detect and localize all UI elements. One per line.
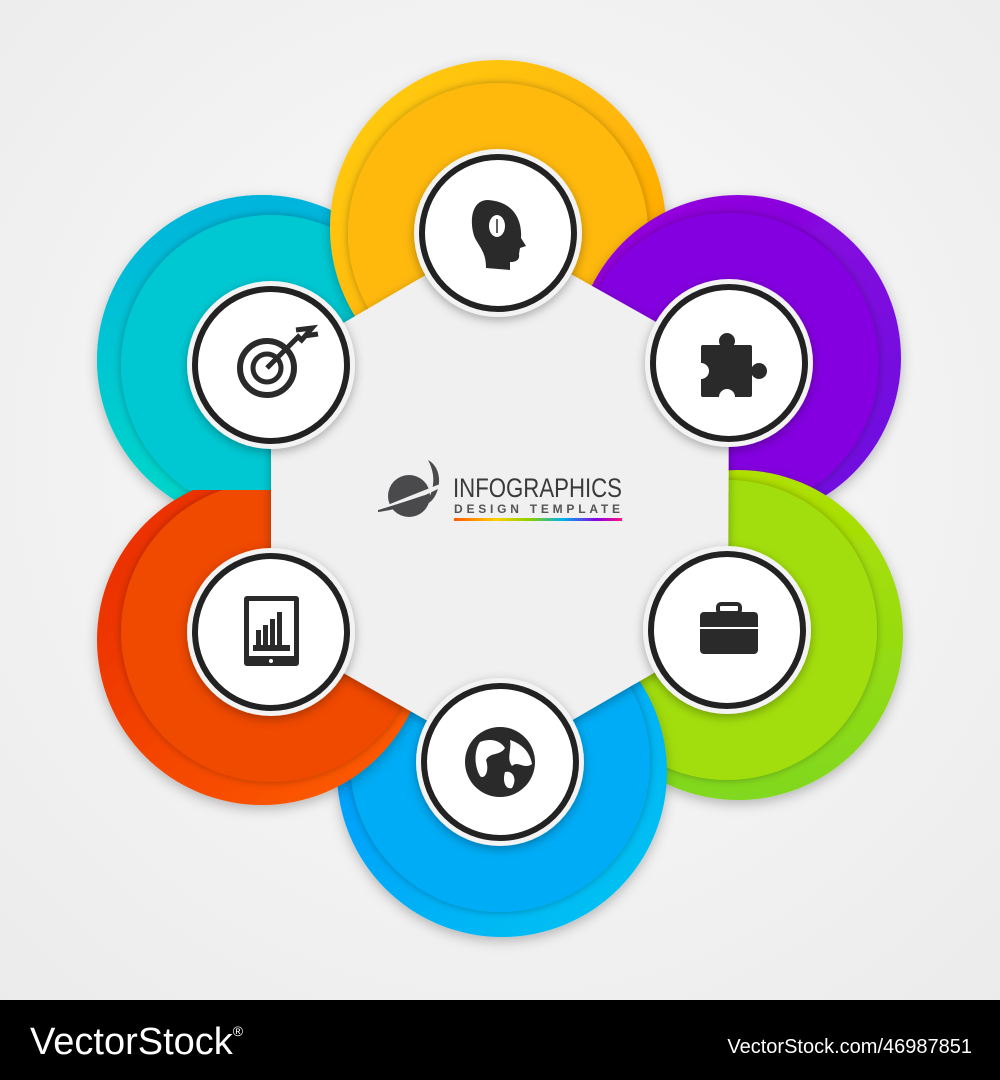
- icon: briefcase: [700, 604, 758, 654]
- petal: cyan overlap: [97, 195, 272, 490]
- icon circle: tablet: [187, 548, 355, 716]
- petals: [97, 60, 903, 937]
- central hexagon: [271, 233, 729, 762]
- petal: cyan: [97, 195, 427, 525]
- footer brand: ®: [233, 1023, 244, 1039]
- footer brand: VectorStock: [30, 1021, 233, 1063]
- icon circle: head: [414, 149, 582, 317]
- icon: target: [240, 328, 318, 395]
- icon circle: briefcase: [643, 546, 811, 714]
- footer id: VectorStock.com/46987851: [727, 1036, 972, 1058]
- logo subtitle: DESIGN TEMPLATE: [454, 502, 620, 516]
- petal: yellow: [330, 60, 666, 396]
- logo title: INFOGRAPHICS: [453, 473, 622, 503]
- petal: blue: [337, 607, 667, 937]
- icon circle: puzzle: [645, 279, 813, 447]
- petal: purple: [575, 195, 901, 521]
- petal: red: [97, 475, 427, 805]
- footer bar: [0, 1000, 1000, 1080]
- icon: puzzle: [693, 333, 767, 405]
- icon circle: target: [187, 281, 355, 449]
- icon: globe: [465, 727, 535, 797]
- icon: head with bulb: [472, 200, 526, 270]
- center logo: [378, 460, 622, 521]
- icon circle: globe: [416, 678, 584, 846]
- icon: tablet chart: [244, 596, 299, 666]
- logo icon: [378, 460, 440, 517]
- petal: green: [573, 470, 903, 800]
